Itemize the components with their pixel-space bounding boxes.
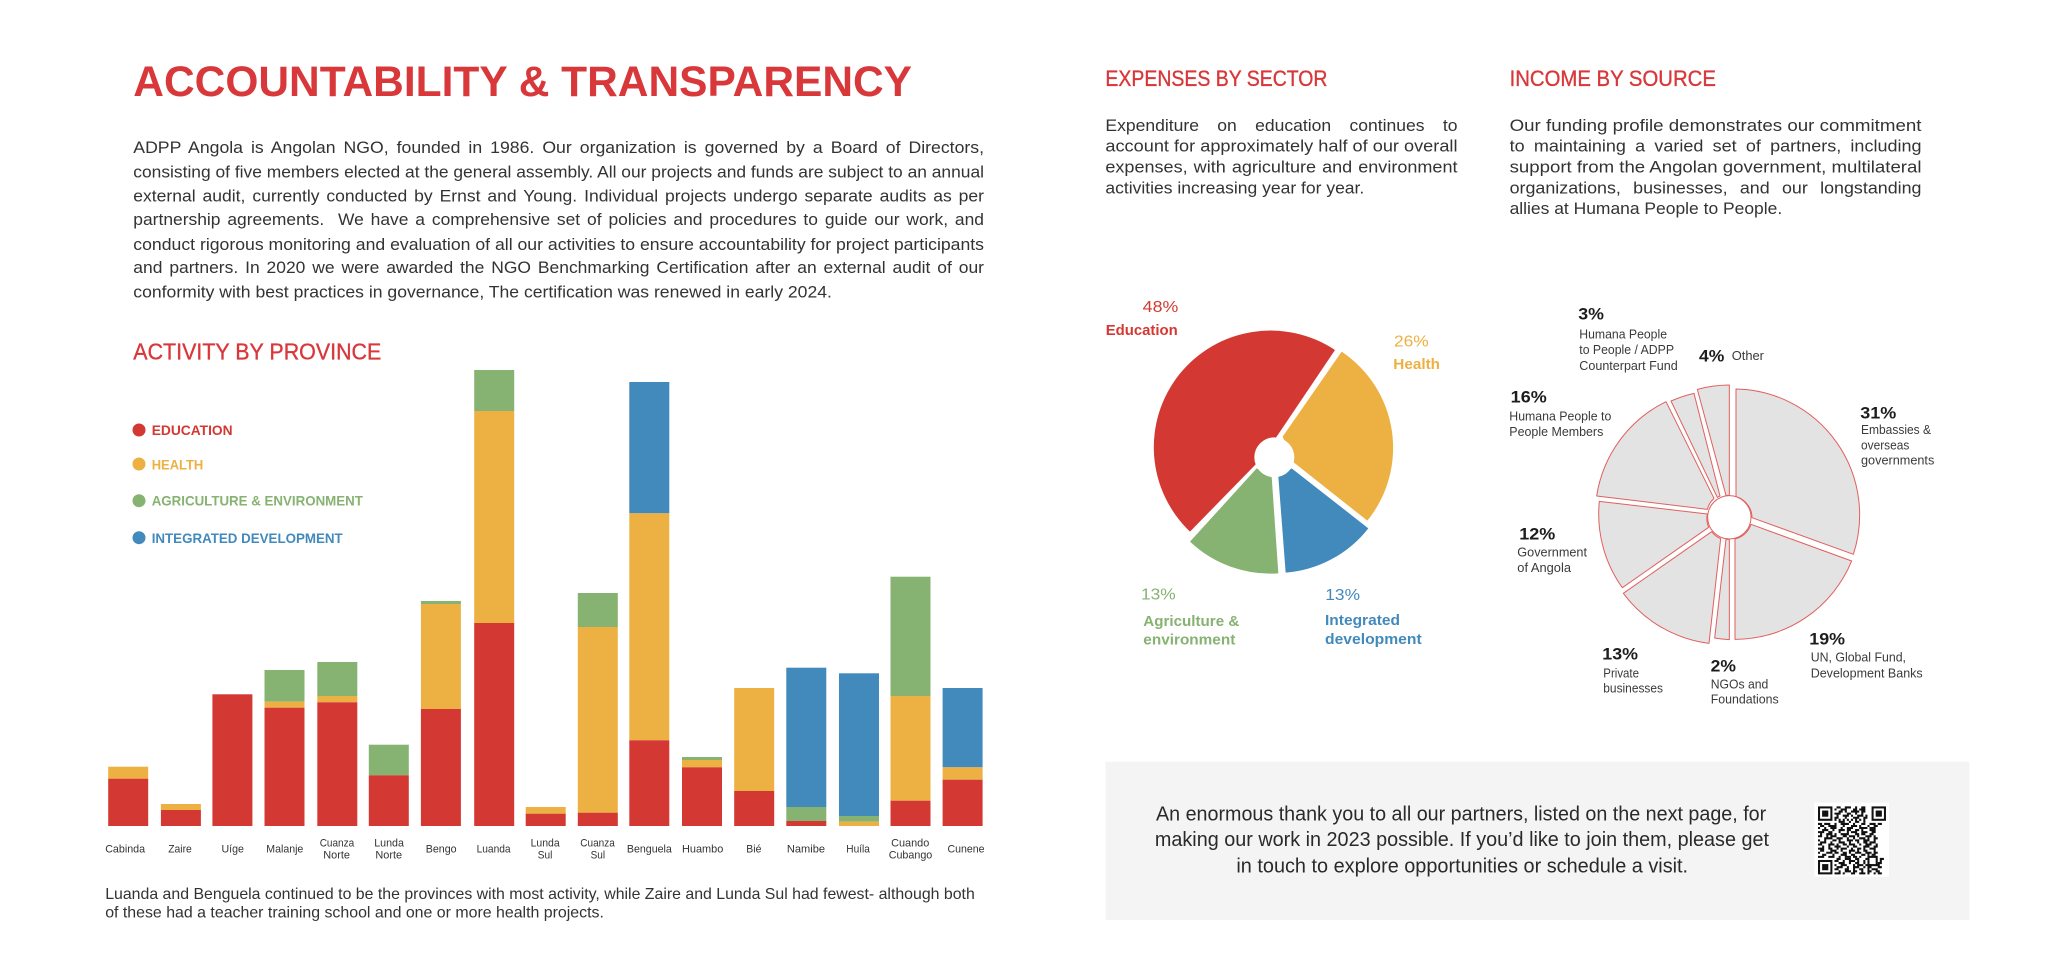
bar: Cuando Cubango	[890, 577, 930, 826]
income label: private businesses: 13%	[1602, 644, 1638, 663]
bar chart province labels: Cuanza	[320, 838, 355, 850]
slice: UN, Global Fund 19%	[1735, 524, 1852, 639]
income label: NGOs and foundations: NGOs and	[1711, 676, 1768, 691]
income label: other: 4%	[1699, 346, 1724, 365]
bar chart province labels: Cunene	[948, 843, 984, 855]
pie label: agriculture and environment: environment	[1143, 631, 1235, 648]
pie chart: expenses by sector	[1154, 331, 1393, 574]
bar: Uige	[212, 694, 252, 826]
intro text block: conduct rigorous monitoring and evaluation of all our activities to ensure accountability for project participants	[133, 235, 984, 254]
bar chart province labels: Sul	[591, 849, 605, 861]
heading: activity by province: ACTIVITY BY PROVINCE	[133, 338, 381, 364]
bar chart province labels: Lunda	[531, 838, 561, 850]
slice: health 26%	[1283, 352, 1393, 521]
slice: education 48%	[1154, 331, 1335, 532]
bar: Luanda	[474, 370, 514, 826]
expenses text block: expenses, with agriculture and environment	[1105, 157, 1458, 176]
income label: UN, Global Fund: UN, Global Fund,	[1811, 650, 1906, 665]
slice: integrated development 13%	[1278, 468, 1368, 573]
income text block: organizations, businesses, and our longstanding	[1510, 178, 1922, 197]
bar chart province labels: Sul	[538, 849, 552, 861]
pie label: integrated development: development	[1325, 631, 1422, 648]
income label: private businesses: Private	[1603, 666, 1639, 681]
bar chart province labels: Cuanza	[580, 838, 616, 850]
income label: UN, Global Fund: Development Banks	[1811, 666, 1923, 681]
pie label: integrated development: Integrated	[1325, 612, 1400, 629]
bar chart province labels: Huíla	[846, 843, 871, 855]
slice: private businesses 13%	[1623, 532, 1721, 643]
income label: UN, Global Fund	[1809, 629, 1923, 681]
income label: government of Angola: of Angola	[1517, 560, 1572, 575]
expenses text block	[1105, 116, 1458, 197]
intro text block: ADPP Angola is Angolan NGO, founded in 1986. Our organization is governed by a Board of Directors,	[133, 138, 984, 157]
income label: embassies	[1860, 403, 1935, 468]
income label: government of Angola: 12%	[1519, 524, 1555, 543]
income text block	[1510, 116, 1922, 218]
bar: Lunda Sul	[526, 807, 566, 826]
bar chart province labels: Uíge	[222, 843, 244, 855]
bar chart province labels: Benguela	[627, 843, 673, 855]
legend item: integrated development: INTEGRATED DEVELOPMENT	[152, 530, 343, 546]
legend item: education: EDUCATION	[152, 422, 233, 438]
pie label: agriculture and environment: Agriculture &	[1143, 613, 1239, 630]
income label: embassies: governments	[1861, 453, 1935, 468]
slice: embassies 31%	[1736, 389, 1860, 554]
slice: government of Angola 12%	[1599, 501, 1709, 588]
bar chart: activity by province	[108, 370, 983, 826]
bar chart province labels: Lunda	[374, 838, 405, 850]
bar chart province labels: Luanda	[477, 843, 511, 855]
income label: other	[1699, 346, 1765, 365]
pie label: agriculture and environment: 13%	[1141, 586, 1176, 603]
intro text block: consisting of five members elected at the general assembly. All our projects and funds are subject to an annual	[133, 163, 984, 182]
income label: embassies: overseas	[1861, 437, 1910, 452]
slice: counterpart fund 3%	[1671, 393, 1720, 497]
income label: Humana members: People Members	[1509, 424, 1604, 439]
bar: Malanje	[264, 670, 304, 826]
income label: government of Angola: Government	[1517, 545, 1587, 560]
income label: government of Angola	[1517, 524, 1587, 575]
pie label: education: Education	[1106, 322, 1178, 339]
pie chart: income by source	[1597, 385, 1860, 643]
slice: NGOs 2%	[1715, 539, 1729, 640]
bar: Cabinda	[108, 767, 148, 826]
legend item: health	[132, 456, 203, 472]
bar chart province labels: Cuando	[891, 838, 929, 850]
expenses text block: activities increasing year for year.	[1105, 178, 1364, 197]
bar chart province labels: Zaire	[168, 843, 192, 855]
bar: Bie	[734, 688, 774, 826]
expenses text block: account for approximately half of our overall	[1105, 137, 1458, 156]
intro text block: conformity with best practices in governance, The certification was renewed in early 2024.	[133, 283, 832, 302]
expenses text block: Expenditure on education continues to	[1105, 116, 1458, 135]
bar: Lunda Norte	[369, 745, 409, 826]
thank-you panel	[1106, 762, 1969, 920]
chart caption: Luanda and Benguela continued to be the provinces with most activity, while Zaire and Lunda Sul had fewest- although both	[105, 886, 975, 903]
pie hub	[1254, 437, 1294, 477]
bar: Bengo	[421, 601, 461, 826]
income label: private businesses	[1602, 644, 1663, 695]
income label: Humana members	[1509, 388, 1611, 439]
pie label: education: 48%	[1143, 299, 1178, 316]
income label: UN, Global Fund: 19%	[1809, 629, 1845, 648]
income label: other: Other	[1732, 348, 1765, 363]
income label: private businesses: businesses	[1603, 680, 1663, 695]
bar chart province labels: Malanje	[266, 843, 303, 855]
pie label: agriculture and environment	[1141, 586, 1239, 648]
heading: expenses by sector: EXPENSES BY SECTOR	[1105, 66, 1328, 91]
income label: counterpart fund	[1578, 304, 1678, 373]
bar: Huila	[839, 673, 879, 826]
bar chart province labels: Cubango	[889, 849, 932, 861]
title: ACCOUNTABILITY & TRANSPARENCY	[133, 58, 912, 106]
pie label: health	[1393, 334, 1440, 373]
bar chart province labels: Norte	[375, 849, 402, 861]
thank-you text: An enormous thank you to all our partners, listed on the next page, for	[1156, 804, 1767, 826]
pie label: health: Health	[1393, 356, 1440, 373]
bar chart province labels: Cabinda	[105, 843, 146, 855]
intro text block: and partners. In 2020 we were awarded the NGO Benchmarking Certification after an external audit of our	[133, 258, 984, 277]
bar: Benguela	[629, 382, 669, 826]
thank-you text	[1155, 804, 1769, 877]
bar chart province labels: Namibe	[787, 843, 825, 855]
icon: QR code	[1814, 803, 1889, 877]
income text block: support from the Angolan government, multilateral	[1510, 157, 1922, 176]
income label: NGOs and foundations: 2%	[1711, 657, 1736, 676]
chart caption	[105, 886, 975, 921]
bar chart province labels: Huambo	[682, 843, 723, 855]
income label: counterpart fund: 3%	[1578, 304, 1604, 323]
bar: Cuanza Norte	[317, 662, 357, 826]
bar: Cunene	[943, 688, 983, 826]
bar chart province labels	[105, 838, 984, 861]
bar chart province labels: Bengo	[426, 843, 457, 855]
income label: counterpart fund: to People / ADPP	[1579, 342, 1674, 357]
bar: Huambo	[682, 757, 722, 826]
thank-you text: in touch to explore opportunities or schedule a visit.	[1236, 855, 1688, 877]
heading: income by source: INCOME BY SOURCE	[1510, 66, 1716, 91]
income label: counterpart fund: Humana People	[1579, 327, 1667, 342]
pie label: integrated development	[1325, 587, 1422, 648]
pie label: integrated development: 13%	[1325, 587, 1360, 604]
income text block: to maintaining a varied set of partners, including	[1510, 137, 1922, 156]
pie label: education	[1106, 299, 1178, 339]
slice: agriculture and environment 13%	[1190, 468, 1278, 574]
income label: Humana members: Humana People to	[1509, 409, 1611, 424]
income label: NGOs and foundations	[1711, 657, 1779, 707]
bar: Zaire	[161, 804, 201, 826]
thank-you text: making our work in 2023 possible. If you’d like to join them, please get	[1155, 829, 1769, 851]
bar: Namibe	[786, 668, 826, 826]
pie hub	[1708, 496, 1751, 539]
bar chart province labels: Bié	[746, 843, 761, 855]
income label: embassies: 31%	[1860, 403, 1896, 422]
income label: NGOs and foundations: Foundations	[1711, 692, 1779, 707]
legend	[132, 422, 363, 546]
income label: embassies: Embassies &	[1861, 422, 1931, 437]
bar: Cuanza Sul	[578, 593, 618, 826]
intro text block: external audit, currently conducted by Ernst and Young. Individual projects undergo separate audits as per	[133, 186, 984, 205]
income label: counterpart fund: Counterpart Fund	[1579, 358, 1678, 373]
bar chart province labels: Norte	[323, 849, 350, 861]
income text block: Our funding profile demonstrates our commitment	[1510, 116, 1922, 135]
legend item: health: HEALTH	[152, 456, 203, 472]
income label: Humana members: 16%	[1511, 388, 1547, 407]
slice: other 4%	[1697, 385, 1729, 495]
pie label: health: 26%	[1394, 334, 1429, 351]
intro text block	[133, 138, 984, 302]
intro text block: partnership agreements. We have a comprehensive set of policies and procedures to guide our work, and	[133, 210, 984, 229]
income text block: allies at Humana People to People.	[1510, 199, 1782, 218]
chart caption: of these had a teacher training school and one or more health projects.	[105, 904, 604, 921]
legend item: agriculture and environment: AGRICULTURE & ENVIRONMENT	[152, 493, 363, 509]
slice: Humana members 16%	[1597, 402, 1714, 509]
